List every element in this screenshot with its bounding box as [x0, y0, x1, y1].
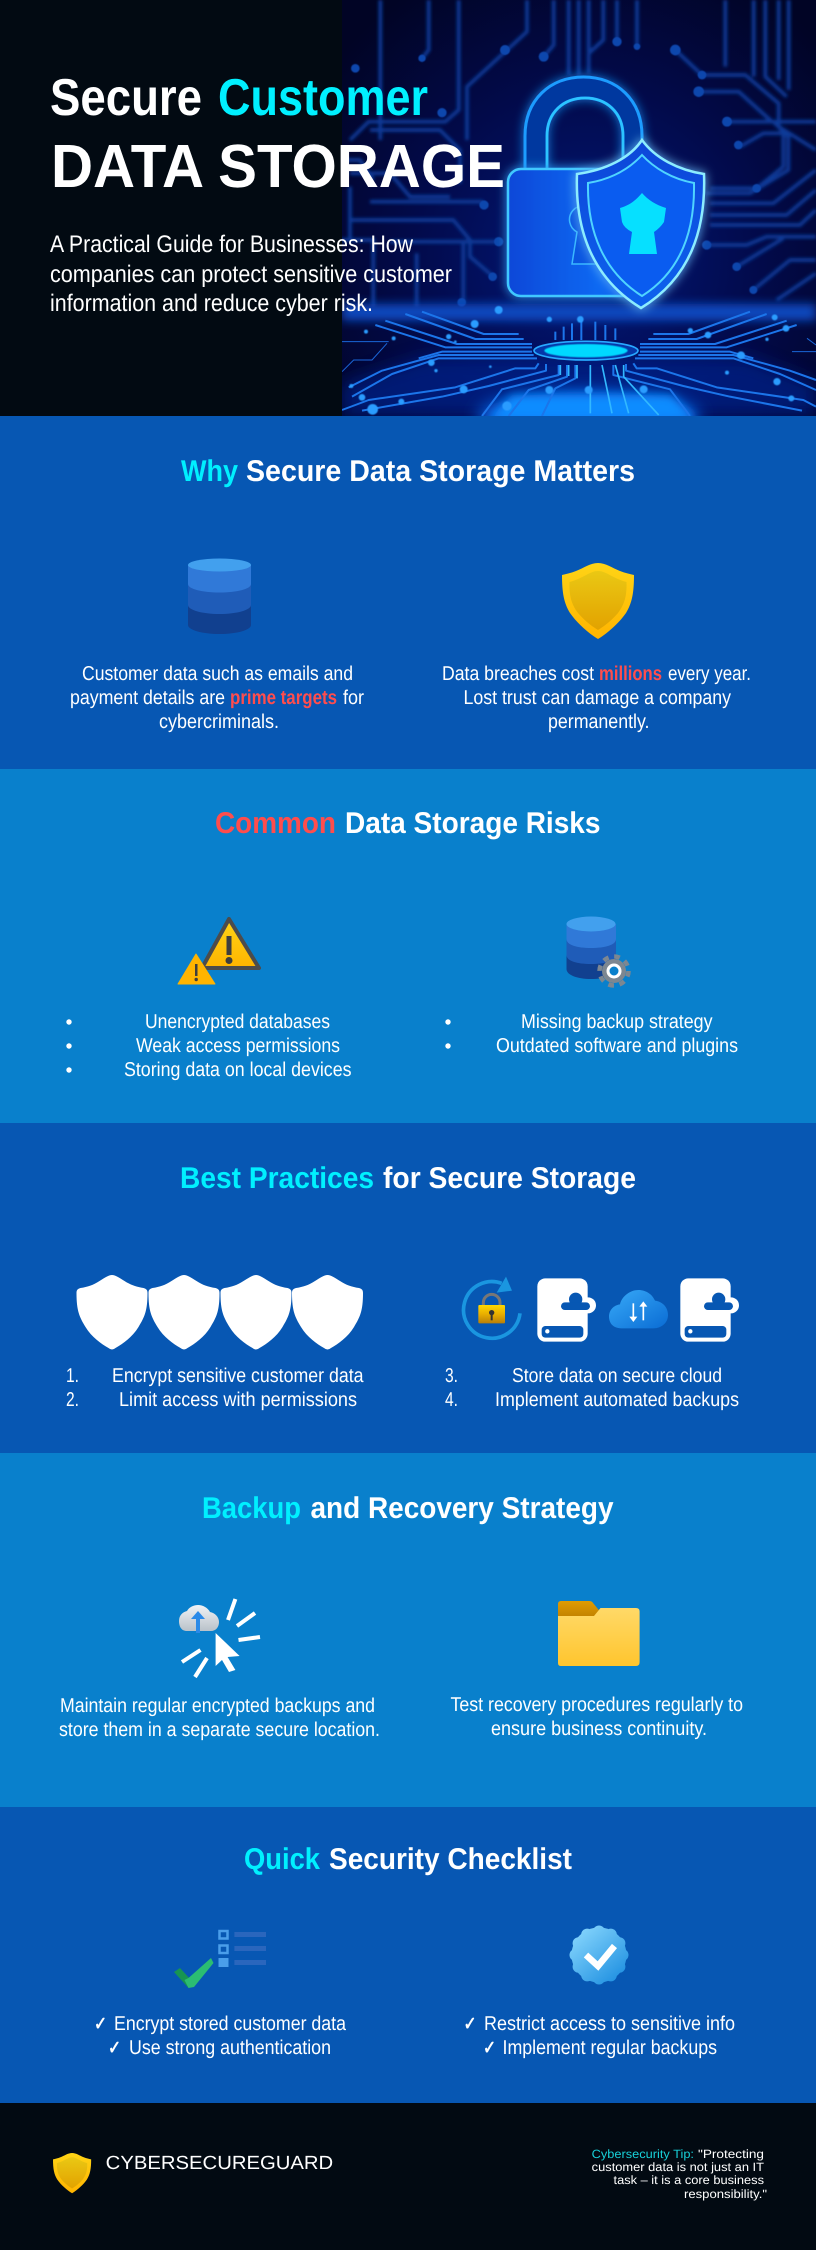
logo: shield and brand name: CYBERSECUREGUARD — [106, 2153, 333, 2174]
icon: checklist with green check — [174, 1931, 266, 1988]
text: checklist left: Encrypt stored customer data — [114, 2013, 347, 2035]
panel: best practices — [0, 1123, 816, 1453]
text: checklist right: ✓ — [464, 2013, 476, 2035]
icon: glowing shield — [577, 140, 704, 308]
heading: for Secure Storage — [383, 1162, 636, 1195]
panel: common data storage risks — [0, 769, 816, 1123]
text: test recovery: Test recovery procedures regularly to — [450, 1694, 743, 1716]
list: practices 3-4: Store data on secure cloud — [512, 1365, 722, 1387]
subtitle text: companies can protect sensitive customer — [50, 261, 452, 288]
subtitle text — [50, 231, 452, 317]
text: millions: every year. — [668, 663, 751, 685]
circuit floor with glowing chip — [342, 297, 816, 416]
list: risks left: Storing data on local devices — [124, 1059, 352, 1081]
icon: sync cloud — [609, 1290, 668, 1328]
text: millions — [442, 663, 751, 733]
cybersecurity tip: task – it is a core business — [614, 2173, 764, 2187]
icons: lock refresh, drives and cloud — [464, 1277, 739, 1342]
title: Customer — [218, 69, 428, 127]
text: test recovery: ensure business continuity. — [491, 1718, 707, 1740]
icon: verified badge — [570, 1926, 628, 1984]
icon: yellow shield — [562, 563, 634, 639]
list: risks left: Weak access permissions — [136, 1035, 340, 1057]
hero image: padlock and shield on circuit board — [340, 0, 816, 442]
subtitle text: information and reduce cyber risk. — [50, 290, 373, 317]
text: millions: permanently. — [548, 711, 650, 733]
text: millions: Lost trust can damage a company — [464, 687, 731, 709]
text: millions: Data breaches cost — [442, 663, 594, 685]
list: risks left — [66, 1011, 352, 1081]
icon: warning triangles — [178, 919, 259, 984]
text: checklist right: ✓ — [483, 2037, 496, 2059]
text: test recovery — [450, 1694, 743, 1740]
footer — [0, 2103, 816, 2250]
heading — [215, 807, 600, 840]
title: DATA STORAGE — [51, 132, 505, 200]
panel: quick security checklist — [0, 1807, 816, 2103]
text: millions: millions — [599, 663, 662, 685]
text: checklist left: Use strong authentication — [129, 2037, 331, 2059]
heading: Quick — [244, 1843, 320, 1876]
panel: backup and recovery — [0, 1453, 816, 1807]
icon: database — [188, 558, 251, 634]
logo: shield and brand name — [53, 2153, 333, 2193]
text: checklist right: Implement regular backups — [502, 2037, 717, 2059]
panel: why secure data storage matters — [0, 416, 816, 769]
list: practices 1-2: 1. — [66, 1365, 79, 1387]
list: practices 1-2: Encrypt sensitive customer data — [112, 1365, 364, 1387]
title: Secure — [50, 69, 202, 127]
panel: hero banner — [50, 0, 816, 416]
text: prime targets: Customer data such as emails and — [82, 663, 353, 685]
heading: Best Practices — [180, 1162, 374, 1195]
list: risks left: Unencrypted databases — [145, 1011, 330, 1033]
list: practices 3-4 — [445, 1365, 739, 1411]
heading — [202, 1492, 614, 1525]
cybersecurity tip: Cybersecurity Tip: — [592, 2147, 694, 2161]
icon: cloud drive second — [680, 1278, 739, 1342]
text: checklist right: Restrict access to sensitive info — [484, 2013, 735, 2035]
text: encrypted backups — [59, 1695, 380, 1741]
list: risks right: Missing backup strategy — [521, 1011, 712, 1033]
text: prime targets — [70, 663, 364, 733]
list: practices 1-2 — [66, 1365, 364, 1411]
text: prime targets: payment details are — [70, 687, 225, 709]
icon: refresh lock — [464, 1277, 520, 1338]
cybersecurity tip: customer data is not just an IT — [592, 2160, 765, 2174]
heading: Data Storage Risks — [345, 807, 600, 840]
icon: four white shields — [76, 1275, 363, 1350]
cybersecurity tip: responsibility." — [684, 2187, 767, 2201]
cybersecurity tip: "Protecting — [698, 2147, 764, 2161]
list: practices 3-4: 3. — [445, 1365, 458, 1387]
text: checklist left — [94, 2013, 347, 2059]
heading: Why — [181, 455, 238, 488]
list: practices 1-2: 2. — [66, 1389, 79, 1411]
text: prime targets: for — [343, 687, 364, 709]
heading — [180, 1162, 636, 1195]
heading: Security Checklist — [329, 1843, 572, 1876]
heading: Common — [215, 807, 336, 840]
heading: Backup — [202, 1492, 301, 1525]
text: encrypted backups: Maintain regular encrypted backups and — [60, 1695, 375, 1717]
icon: folder — [558, 1601, 640, 1666]
text: checklist left: ✓ — [94, 2013, 107, 2035]
cybersecurity tip — [592, 2147, 767, 2201]
list: risks right — [445, 1011, 738, 1057]
icon: cloud upload click — [179, 1599, 260, 1677]
text: checklist left: ✓ — [108, 2037, 121, 2059]
list: risks right: Outdated software and plugins — [496, 1035, 738, 1057]
icon: cloud drive — [537, 1278, 596, 1342]
list: practices 3-4: 4. — [445, 1389, 458, 1411]
text: checklist right — [464, 2013, 735, 2059]
text: prime targets: cybercriminals. — [159, 711, 279, 733]
title — [50, 69, 505, 200]
text: encrypted backups: store them in a separate secure location. — [59, 1719, 380, 1741]
list: practices 3-4: Implement automated backups — [495, 1389, 739, 1411]
list: practices 1-2: Limit access with permissions — [119, 1389, 357, 1411]
subtitle text: A Practical Guide for Businesses: How — [50, 231, 414, 258]
heading: Secure Data Storage Matters — [246, 455, 635, 488]
text: prime targets: prime targets — [230, 687, 337, 709]
icon: padlock — [508, 77, 658, 296]
heading: and Recovery Strategy — [310, 1492, 614, 1525]
icon: database with gear — [566, 916, 628, 986]
